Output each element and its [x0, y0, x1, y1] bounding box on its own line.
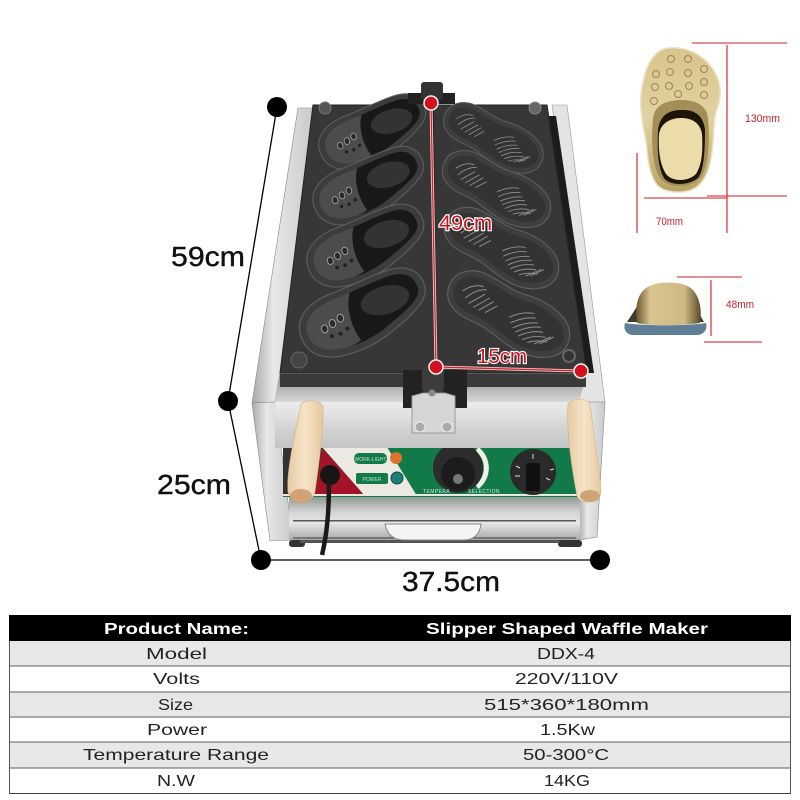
front upper panel: [275, 402, 578, 448]
panel caption: SELECTION: [468, 489, 500, 495]
left side panel: [252, 108, 313, 403]
right plate gap: [548, 116, 594, 373]
row: net weight: N.W: [157, 773, 196, 790]
left body column: [252, 402, 293, 541]
timer knob: [510, 449, 556, 495]
value: volts: 220V/110V: [515, 671, 618, 688]
label: width: 37.5cm: [402, 566, 500, 597]
toe studs: [650, 56, 708, 104]
row: volts: Volts: [153, 671, 200, 688]
row: model: Model: [146, 646, 207, 663]
power cord: [320, 465, 340, 555]
specification table: [9, 615, 791, 794]
indicator label: power: [356, 473, 388, 484]
griddle plate: [280, 105, 587, 373]
left wooden handle: [288, 401, 323, 501]
left moulds: clog tops: [290, 88, 437, 366]
indicator label: work light: [354, 453, 387, 464]
right handle end: [580, 490, 600, 502]
value: temperature range: 50-300°C: [523, 747, 609, 764]
indicator: power lamp: [391, 472, 403, 484]
drawer handle: [385, 524, 481, 540]
dimension: black outline: [218, 97, 610, 570]
row: temperature range: Temperature Range: [83, 747, 269, 764]
label: slipper width: 70mm: [656, 216, 683, 228]
label: height: 25cm: [157, 469, 231, 500]
panel caption: TEMPERA: [423, 489, 450, 495]
side view dimension lines: [677, 277, 762, 342]
slipper side view: [624, 282, 707, 335]
indicator label: work light: WORK-LIGHT: [355, 457, 386, 463]
hinge bar: [280, 374, 586, 387]
machine feet: [289, 540, 582, 547]
temperature knob: [433, 443, 486, 493]
left handle end: [290, 489, 312, 503]
header: product name: Product Name:: [104, 621, 249, 638]
label: plate length: 49cm: [439, 212, 492, 235]
row: power: Power: [147, 722, 208, 739]
value: model: DDX-4: [537, 646, 595, 663]
header: product value: Slipper Shaped Waffle Maker: [426, 621, 708, 638]
label: slipper height: 48mm: [726, 299, 754, 311]
value: power: 1.5Kw: [540, 722, 596, 739]
plate bolts: [291, 102, 575, 368]
right side panel: [552, 105, 605, 402]
right wooden handle: [568, 399, 601, 502]
value: net weight: 14KG: [544, 773, 590, 790]
slipper dimension lines: [637, 43, 787, 233]
right body column: [578, 402, 605, 540]
label: depth: 59cm: [171, 241, 245, 272]
shelf below plate: [275, 373, 587, 402]
front hinge bracket: [403, 366, 467, 433]
product photo: waffle maker: [252, 82, 605, 555]
row: size: Size: [158, 697, 193, 714]
dimension: red plate lines: [424, 96, 588, 378]
drawer: [289, 497, 580, 540]
right moulds: clog soles: [432, 96, 581, 367]
indicator: work light lamp: [390, 452, 402, 464]
control panel: [283, 443, 580, 497]
slipper top view: [641, 48, 720, 192]
plate centre seam: [433, 105, 437, 373]
table rows: [9, 615, 791, 794]
slipper opening: [652, 100, 709, 186]
label: plate width: 15cm: [477, 346, 527, 368]
label: slipper length: 130mm: [745, 113, 780, 125]
top hinge: [408, 82, 455, 104]
indicator label: power: POWER: [363, 477, 382, 483]
value: size: 515*360*180mm: [484, 697, 649, 714]
